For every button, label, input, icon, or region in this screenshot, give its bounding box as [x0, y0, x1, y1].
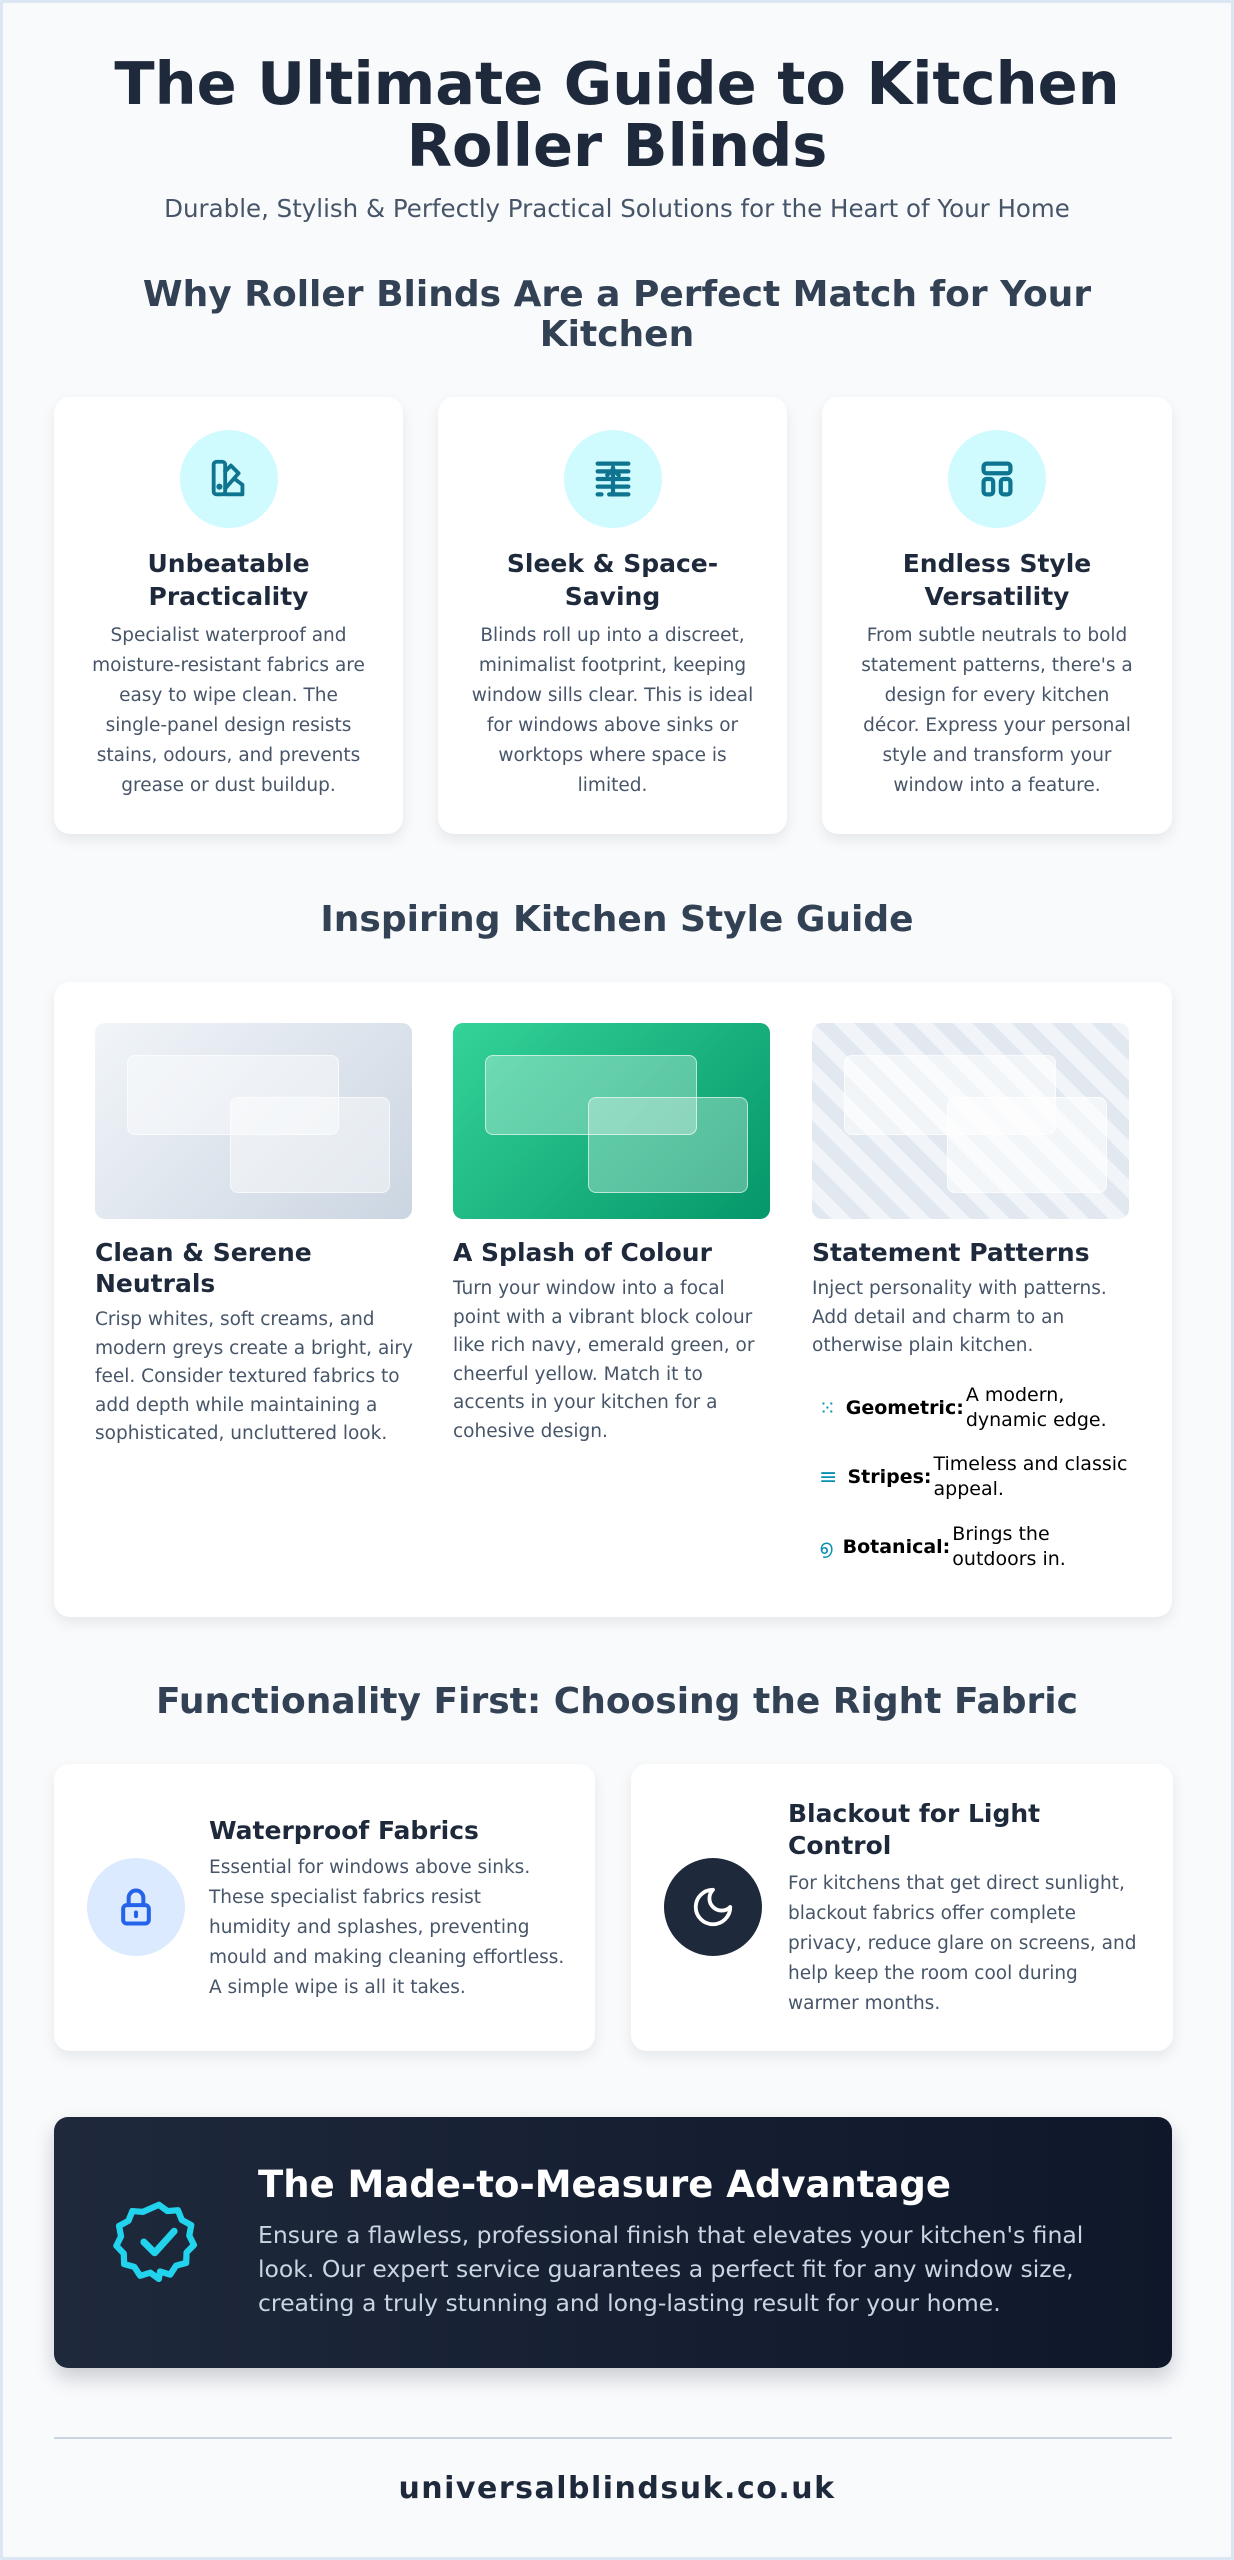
- icon: lock: [87, 1858, 185, 1956]
- card: blackout: [631, 1764, 1173, 2051]
- image: neutrals: [95, 1023, 412, 1219]
- image: patterns: [812, 1023, 1129, 1219]
- card text: Specialist waterproof and moisture-resistant fabrics are easy to wipe clean. The single-panel design resists stains, odours, and prevents grease or dust buildup.: [92, 625, 365, 796]
- heading: fabric: Functionality First: Choosing the Right Fabric: [156, 1681, 1078, 1722]
- text: humidity and splashes, preventing: [209, 1917, 530, 1938]
- banner text: Ensure a flawless, professional finish that elevates your kitchen's final look. Our expert service guarantees a perfect fit for any window size, creating a truly stunning and long-lasting result for your home.: [258, 2221, 1083, 2317]
- banner title: The Made-to-Measure Advantage: [258, 2163, 951, 2206]
- list: geometric: dynamic edge.: [966, 1409, 1107, 1431]
- icon: swatch: [180, 430, 278, 528]
- list: botanical: Brings the: [952, 1523, 1050, 1545]
- footer: website: universalblindsuk.co.uk: [398, 2471, 836, 2506]
- text: A simple wipe is all it takes.: [209, 1977, 466, 1998]
- panel: style guide: [54, 982, 1172, 1617]
- banner: made-to-measure: [54, 2117, 1172, 2368]
- style: neutrals text: [95, 1238, 413, 1444]
- title: The Ultimate Guide to Kitchen: [114, 49, 1120, 118]
- style: neutrals text: Neutrals: [95, 1269, 215, 1298]
- icon: moon: [664, 1858, 762, 1956]
- style: colour text: Turn your window into a focal point with a vibrant block colour like rich navy, emerald green, or cheerful yellow. Match it to accents in your kitchen for a cohesive design.: [453, 1278, 754, 1442]
- title: [114, 49, 1120, 180]
- list: botanical: ൭: [819, 1534, 833, 1558]
- card text: Blinds roll up into a discreet, minimalist footprint, keeping window sills clear. This is ideal for windows above sinks or worktops where space is limited.: [472, 625, 753, 796]
- style: colour text: A Splash of Colour: [453, 1238, 712, 1267]
- card title: Sleek & Space-: [507, 549, 718, 578]
- list: stripes: [819, 1453, 1127, 1500]
- card: sleek: [438, 397, 787, 834]
- title: Blackout for Light: [788, 1799, 1040, 1828]
- style: neutrals text: Crisp whites, soft creams, and modern greys create a bright, airy feel. Consider textured fabrics to add depth while maintaining a sophisticated, uncluttered look.: [95, 1309, 413, 1444]
- style: patterns text: Inject personality with patterns. Add detail and charm to an otherwise plain kitchen.: [812, 1278, 1107, 1356]
- list: stripes: ≡: [819, 1464, 837, 1490]
- card: practicality: [54, 397, 403, 834]
- card title: Unbeatable: [147, 549, 310, 578]
- list: stripes: appeal.: [933, 1478, 1004, 1500]
- card title: Saving: [565, 582, 660, 611]
- icon: blind: [564, 430, 662, 528]
- card title: Versatility: [925, 582, 1069, 611]
- title: Waterproof Fabrics: [209, 1816, 479, 1845]
- title: [788, 1799, 1040, 1860]
- style: patterns text: [812, 1238, 1107, 1356]
- icon: layout: [948, 430, 1046, 528]
- list: botanical: outdoors in.: [952, 1548, 1066, 1570]
- card: waterproof: [54, 1764, 595, 2051]
- icon: badge check: [113, 2202, 198, 2282]
- style: neutrals text: Clean & Serene: [95, 1238, 312, 1267]
- subtitle: Durable, Stylish & Perfectly Practical Solutions for the Heart of Your Home: [164, 194, 1070, 223]
- text: [208, 1857, 564, 1998]
- image: colour: [453, 1023, 770, 1219]
- list: geometric: ⁙: [819, 1396, 836, 1420]
- card title: [507, 549, 718, 611]
- list: stripes: Timeless and classic: [933, 1453, 1127, 1475]
- list: geometric: Geometric:: [846, 1396, 964, 1418]
- list: geometric: A modern,: [966, 1384, 1064, 1406]
- style: patterns text: Statement Patterns: [812, 1238, 1090, 1267]
- card title: [147, 549, 310, 611]
- list: botanical: [819, 1523, 1066, 1570]
- list: geometric: [819, 1384, 1107, 1431]
- text: mould and making cleaning effortless.: [209, 1947, 564, 1968]
- card title: [903, 549, 1091, 611]
- text: Essential for windows above sinks.: [209, 1857, 530, 1878]
- card title: Practicality: [149, 582, 308, 611]
- heading: why roller blinds: Kitchen: [540, 314, 694, 355]
- panel: benefits cards: [53, 420, 1173, 841]
- card text: From subtle neutrals to bold statement patterns, there's a design for every kitchen décor. Express your personal style and transform your window into a feature.: [861, 625, 1133, 796]
- text: For kitchens that get direct sunlight, blackout fabrics offer complete privacy, reduce glare on screens, and help keep the room cool during warmer months.: [788, 1873, 1136, 2014]
- list: stripes: Stripes:: [847, 1466, 931, 1488]
- title: Roller Blinds: [407, 111, 827, 180]
- heading: why roller blinds: Why Roller Blinds Are a Perfect Match for Your: [143, 274, 1091, 315]
- title: Control: [788, 1831, 891, 1860]
- card: versatility: [822, 397, 1172, 834]
- text: These specialist fabrics resist: [209, 1887, 481, 1908]
- heading: why roller blinds: [143, 274, 1092, 355]
- card title: Endless Style: [903, 549, 1091, 578]
- heading: style guide: Inspiring Kitchen Style Guide: [320, 899, 914, 940]
- list: botanical: Botanical:: [843, 1536, 950, 1558]
